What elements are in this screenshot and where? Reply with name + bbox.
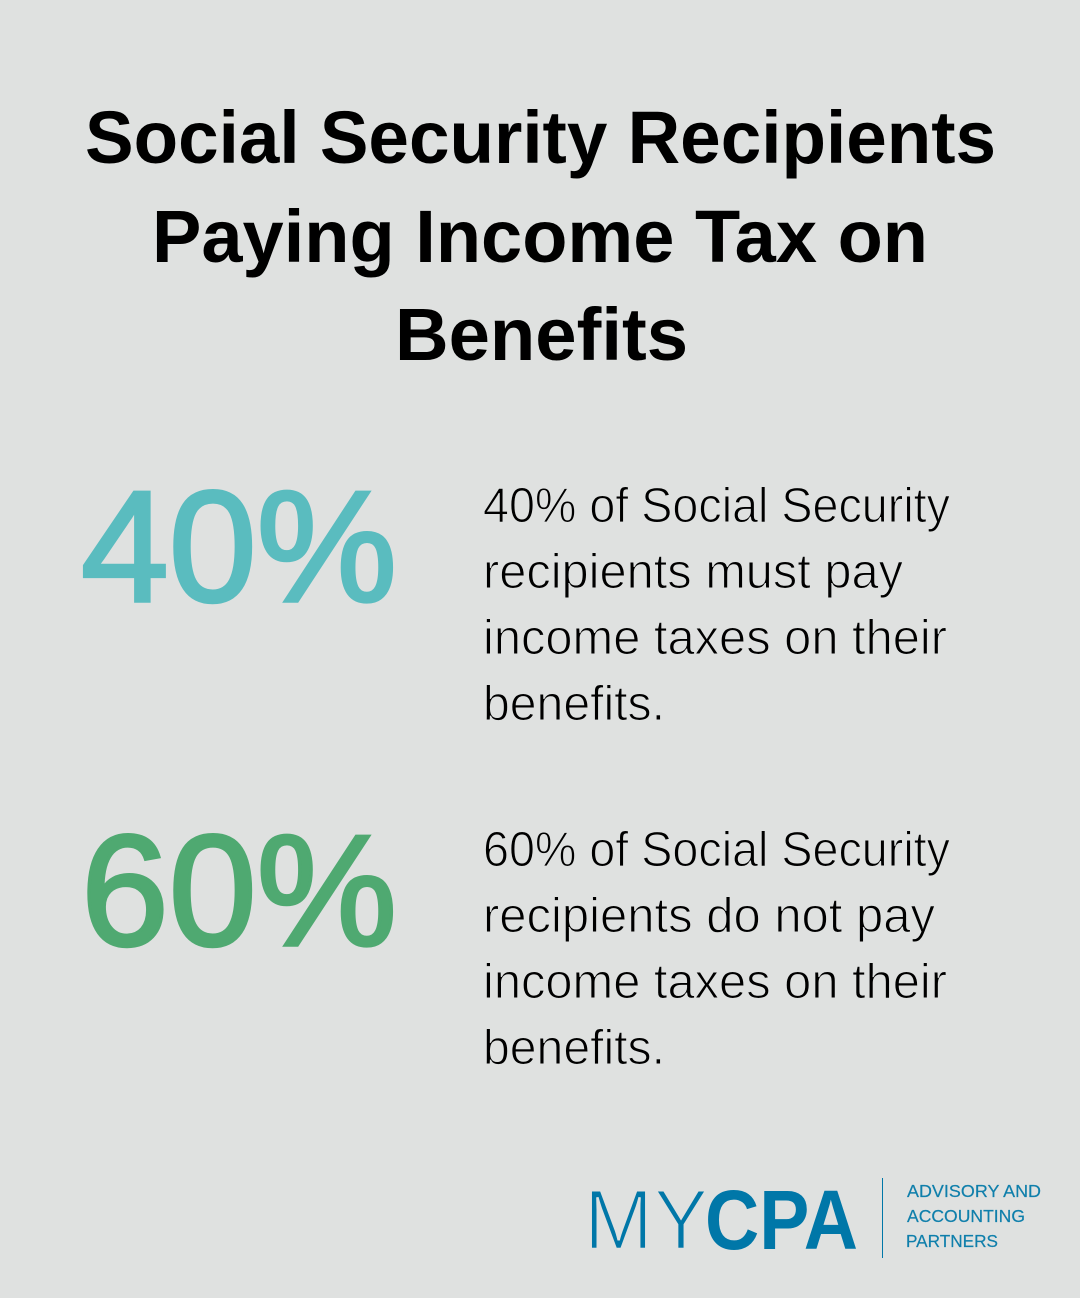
logo: MYCPA: ACCOUNTING [907,1206,1025,1226]
statistic: 60%: 60% [81,803,397,979]
logo: MYCPA: ADVISORY AND [907,1181,1041,1201]
description: 40% of recipients: 40% of Social Security [483,479,950,533]
logo: MYCPA: PARTNERS [906,1231,998,1251]
description: 60% of recipients: income taxes on their [483,955,947,1009]
title: Benefits [395,293,688,376]
description: 40% of recipients: recipients must pay [483,545,903,599]
description: 60% of recipients: benefits. [483,1021,665,1075]
description: 60% of recipients [483,823,950,1075]
logo: MYCPA: CPA [705,1173,858,1267]
description: 60% of recipients: recipients do not pay [483,889,935,943]
title: Social Security Recipients [85,96,996,179]
logo: MYCPA: M [584,1173,653,1268]
title: Paying Income Tax on [152,195,928,278]
logo: MYCPA: Y [654,1173,708,1268]
description: 40% of recipients: benefits. [483,677,665,731]
description: 60% of recipients: 60% of Social Security [483,823,950,877]
statistic: 40%: 40% [81,459,397,635]
logo: MYCPA [584,1173,1041,1268]
description: 40% of recipients: income taxes on their [483,611,947,665]
description: 40% of recipients [483,479,950,731]
title [85,96,996,376]
